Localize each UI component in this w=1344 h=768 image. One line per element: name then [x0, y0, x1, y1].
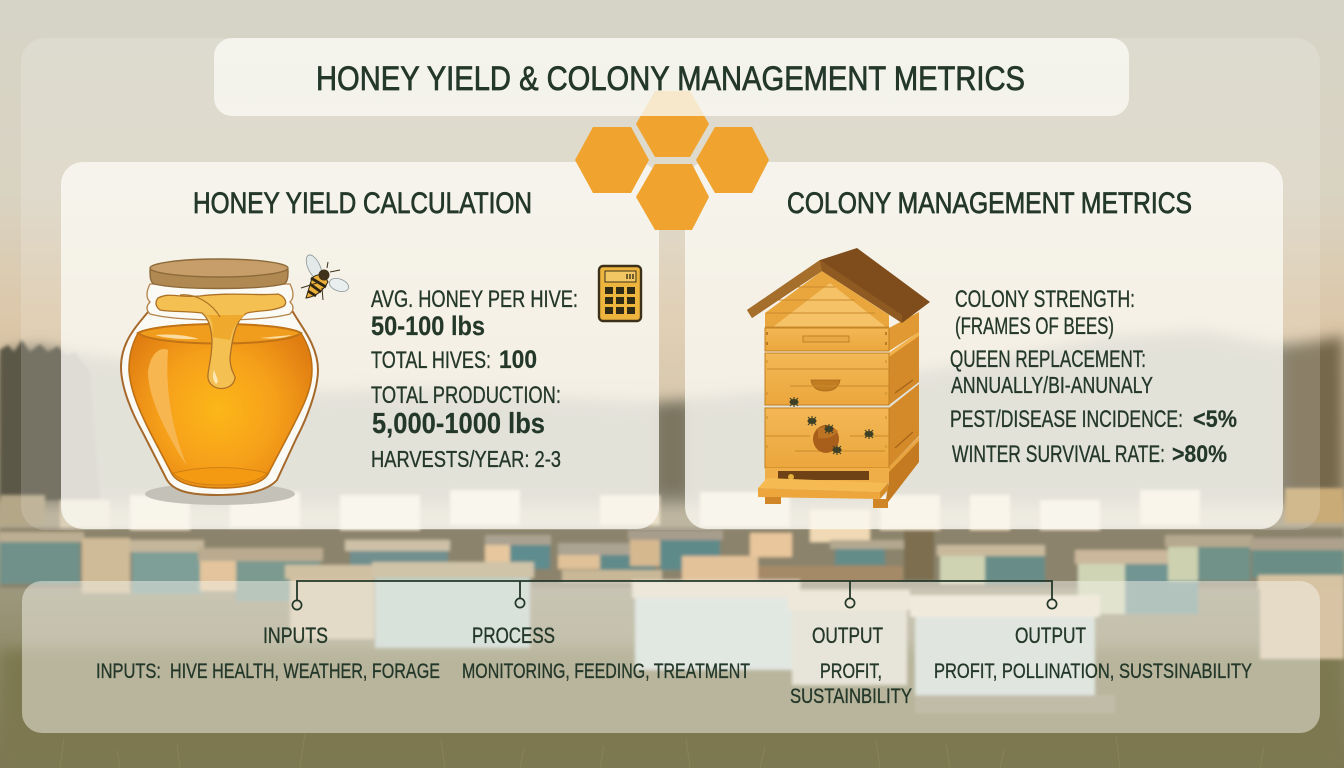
heading: honey yield: HONEY YIELD CALCULATION: [193, 187, 532, 220]
honey yield metrics text: [371, 286, 578, 472]
icon: calculator: [599, 266, 641, 321]
honey yield metrics text: 50-100 lbs: [371, 311, 485, 341]
honeycomb hexagons: [575, 127, 769, 230]
colony metrics text: COLONY STRENGTH:: [955, 286, 1135, 313]
column: output one: PROFIT,: [820, 660, 882, 683]
colony metrics text: PEST/DISEASE INCIDENCE:: [950, 406, 1183, 433]
column: output one: OUTPUT: [812, 623, 883, 648]
column: inputs: INPUTS: [263, 623, 328, 648]
honey yield metrics text: 5,000-1000 lbs: [372, 408, 545, 440]
icon: bee: [301, 253, 350, 300]
column: output one: SUSTAINBILITY: [790, 685, 912, 708]
column: inputs: HIVE HEALTH, WEATHER, FORAGE: [170, 660, 440, 683]
panel: colony management metrics: [685, 162, 1283, 529]
colony metrics text: ANNUALLY/BI-ANUNALY: [951, 372, 1153, 398]
colony metrics text: QUEEN REPLACEMENT:: [950, 346, 1146, 373]
panel: process flow: [22, 581, 1320, 733]
far-left treeline: [0, 340, 100, 500]
hexagon: top: [636, 91, 709, 157]
column: output one: [790, 623, 912, 708]
honey yield metrics text: AVG. HONEY PER HIVE:: [371, 286, 578, 313]
column: process: MONITORING, FEEDING, TREATMENT: [462, 660, 750, 683]
honey yield metrics text: HARVESTS/YEAR: 2-3: [371, 446, 561, 472]
outer frame panel: [21, 38, 1320, 530]
title banner: [214, 38, 1129, 116]
column: output two: PROFIT, POLLINATION, SUSTSINABILITY: [934, 660, 1252, 683]
colony metrics text: WINTER SURVIVAL RATE:: [952, 441, 1165, 468]
honey yield metrics text: TOTAL PRODUCTION:: [371, 382, 561, 409]
panel: honey yield calculation: [61, 162, 659, 529]
colony metrics text: [950, 286, 1237, 468]
honey yield metrics text: TOTAL HIVES:: [371, 347, 491, 374]
title text: HONEY YIELD & COLONY MANAGEMENT METRICS: [316, 60, 1025, 98]
flow connector: [292, 581, 1057, 610]
bees on hive: [790, 397, 873, 455]
colony metrics text: (FRAMES OF BEES): [955, 313, 1114, 340]
honey yield metrics text: 100: [499, 346, 537, 374]
icon: honey jar: [121, 259, 318, 505]
heading: colony management: COLONY MANAGEMENT METRICS: [787, 187, 1192, 220]
column: process: PROCESS: [472, 623, 555, 648]
column: output two: [934, 623, 1252, 683]
colony metrics text: >80%: [1172, 441, 1227, 468]
column: inputs: INPUTS:: [96, 660, 161, 683]
column: process: [462, 623, 750, 683]
column: output two: OUTPUT: [1015, 623, 1086, 648]
colony metrics text: <5%: [1193, 406, 1237, 433]
icon: wooden beehive: [747, 248, 930, 508]
column: inputs: [96, 623, 440, 683]
